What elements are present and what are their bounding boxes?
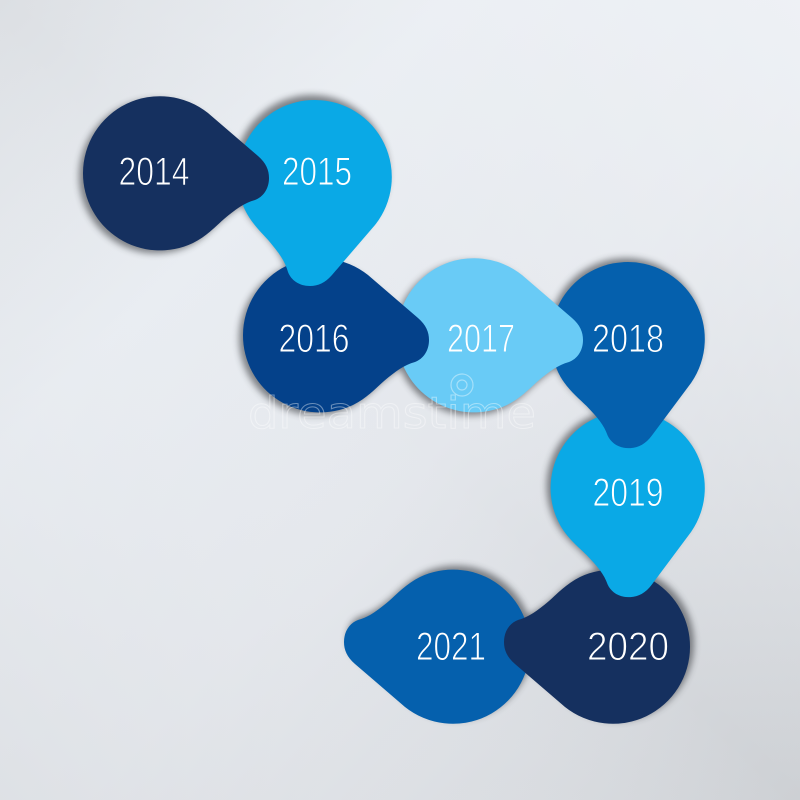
drop: 2015 bbox=[238, 100, 392, 286]
drop: 2016: 2016 bbox=[278, 317, 350, 361]
drop: 2017: 2017 bbox=[447, 317, 515, 361]
drop: 2016 bbox=[243, 258, 429, 412]
watermark: dreamstime bbox=[248, 388, 536, 439]
drop: 2017 bbox=[397, 258, 583, 412]
drop shadows bbox=[79, 95, 710, 721]
drop: 2021: 2021 bbox=[416, 625, 486, 669]
drop: 2014: 2014 bbox=[118, 150, 190, 194]
drop: 2021 bbox=[344, 570, 530, 724]
drop: 2018 bbox=[545, 257, 712, 453]
drop: 2015: 2015 bbox=[282, 150, 352, 194]
drop: 2020: 2020 bbox=[587, 625, 669, 669]
drop: 2019: 2019 bbox=[592, 471, 664, 515]
drop: 2019 bbox=[545, 406, 712, 602]
drop: 2020 bbox=[504, 570, 690, 724]
drop: 2014 bbox=[83, 96, 269, 250]
drop: 2018: 2018 bbox=[592, 317, 664, 361]
